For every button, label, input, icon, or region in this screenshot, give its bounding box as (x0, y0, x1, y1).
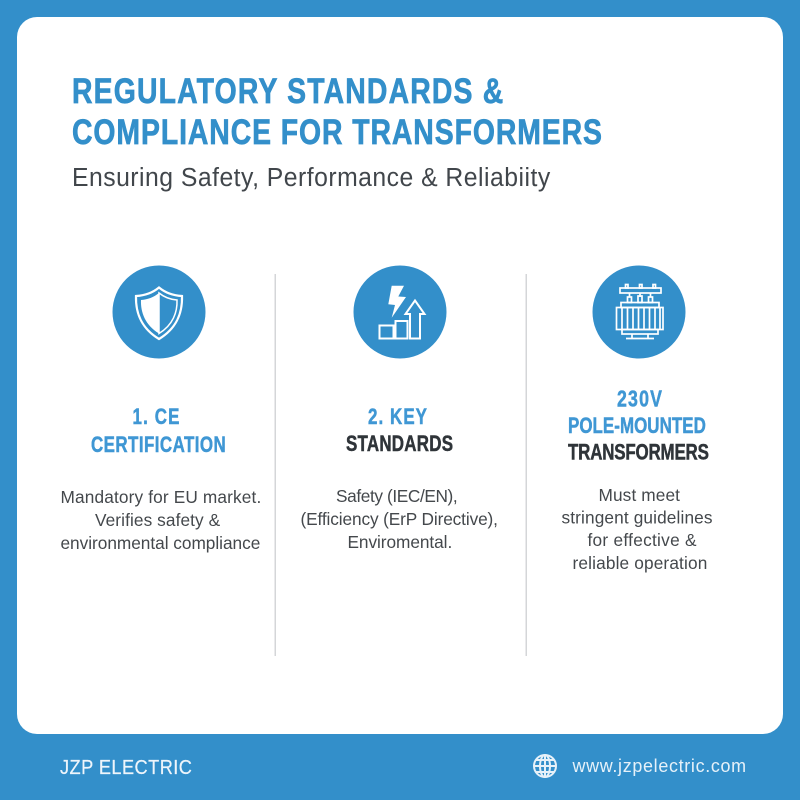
heading: 1. CE Certification (91, 405, 226, 458)
text: CE description (60, 487, 261, 553)
text: CE description: environmental compliance (60, 533, 260, 553)
heading: 230V pole-mounted transformers (568, 386, 709, 465)
website address: www.jzpelectric.com (572, 756, 746, 776)
icon: globe (534, 755, 556, 777)
icon: transformer (592, 266, 686, 358)
footer: website (534, 755, 746, 777)
panel: CE certification (60, 266, 261, 553)
icon: bolt and rising steps (354, 266, 446, 358)
heading: 230V pole-mounted transformers: POLE-MOUNTED (568, 414, 706, 439)
text: standards description: Safety (IEC/EN), (336, 486, 458, 506)
heading: 230V pole-mounted transformers: 230V (617, 386, 662, 412)
subtitle: Ensuring Safety, Performance & Reliabiity (72, 164, 551, 192)
title: COMPLIANCE FOR TRANSFORMERS (72, 112, 602, 152)
text: transformer description (562, 485, 713, 573)
panel: 230V transformers (562, 266, 713, 573)
text: transformer description: Must meet (598, 485, 680, 505)
heading: 230V pole-mounted transformers: TRANSFORMERS (568, 440, 709, 465)
text: standards description (300, 486, 498, 552)
text: transformer description: reliable operation (572, 553, 707, 573)
text: transformer description: for effective & (588, 530, 697, 550)
text: standards description: Enviromental. (348, 532, 452, 552)
heading: 2. Key Standards: 2. KEY (368, 405, 427, 430)
text: transformer description: stringent guidelines (562, 507, 713, 528)
heading: 2. Key Standards (346, 405, 453, 457)
text: standards description: (Efficiency (ErP Directive), (300, 509, 498, 529)
panel: key standards (300, 266, 498, 552)
text: CE description: Verifies safety & (95, 510, 220, 530)
footer: brand name: JZP ELECTRIC (60, 757, 192, 779)
heading: 2. Key Standards: STANDARDS (346, 432, 453, 457)
heading: 1. CE Certification: 1. CE (132, 405, 179, 430)
text: CE description: Mandatory for EU market. (60, 487, 261, 507)
icon: shield (112, 266, 206, 358)
title: REGULATORY STANDARDS & (72, 71, 503, 111)
title (72, 71, 602, 152)
heading: 1. CE Certification: CERTIFICATION (91, 433, 226, 458)
